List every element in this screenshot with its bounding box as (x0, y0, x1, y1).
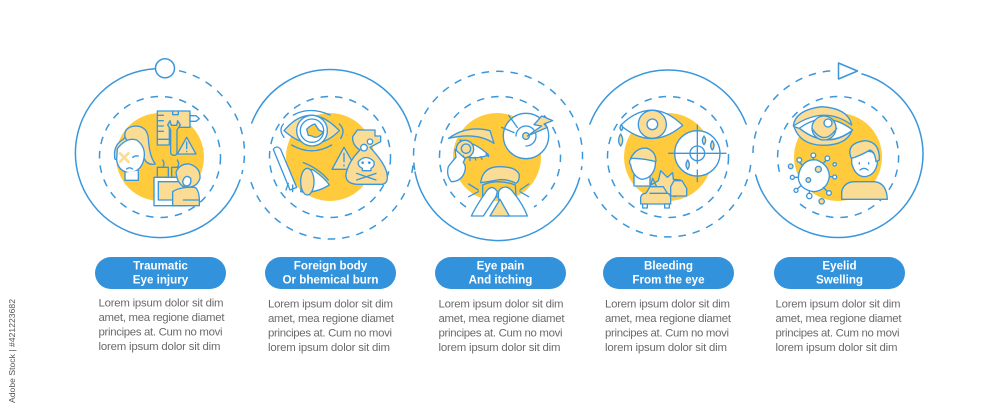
label pill: traumatic eye injury: Traumatic (133, 260, 188, 272)
inner dashed ring (270, 96, 390, 218)
body text column 4: amet, mea regione diamet (605, 313, 732, 325)
icons: drill, wrench, warning, face, stove, child (115, 111, 200, 206)
body text column 1 (98, 298, 225, 353)
label pill: traumatic eye injury (95, 257, 226, 289)
yellow disc (453, 113, 541, 201)
body text column 5 (776, 298, 902, 354)
icons: rubbed eye, target pain, crying person (448, 113, 553, 216)
panel: traumatic eye injury (75, 59, 244, 238)
label pill: bleeding (603, 257, 734, 289)
body text column 5: Lorem ipsum dolor sit dim (776, 298, 900, 310)
body text column 4: Lorem ipsum dolor sit dim (605, 298, 730, 310)
label pill: eye pain (435, 257, 566, 289)
body text column 3: principes at. Cum no movi (438, 328, 562, 340)
label pill: traumatic eye injury: Eye injury (133, 274, 189, 286)
body text column 2: principes at. Cum no movi (268, 328, 392, 340)
panel: foreign body or chemical burn (250, 69, 413, 239)
body text column 2: amet, mea regione diamet (268, 313, 395, 325)
body text column 3 (438, 298, 565, 354)
label pill: foreign body (265, 257, 396, 289)
yellow disc (624, 113, 712, 201)
ring: outer circle half dashed half solid (414, 71, 582, 241)
yellow disc (116, 113, 204, 201)
panel: eyelid swelling (753, 63, 923, 237)
inner dashed ring (440, 96, 561, 207)
body text column 1: principes at. Cum no movi (98, 326, 222, 338)
body text column 4: lorem ipsum dolor sit dim (605, 342, 727, 354)
panel: bleeding from the eye (588, 70, 751, 237)
inner dashed ring (100, 96, 220, 218)
body text column 3: amet, mea regione diamet (438, 313, 565, 325)
label pill: foreign body: Foreign body (294, 260, 368, 272)
ring: outer circle with start marker (75, 59, 244, 238)
ring: outer circle half solid half dashed (588, 70, 751, 237)
icons: bleeding eye, target drops, bandaged head, car crash (619, 110, 726, 208)
label pill: foreign body: Or bhemical burn (282, 274, 378, 286)
panel: eye pain and itching (414, 71, 582, 241)
body text column 5: principes at. Cum no movi (776, 328, 900, 340)
body text column 5: amet, mea regione diamet (776, 313, 902, 325)
label pill: eye pain: And itching (469, 274, 532, 286)
ring: outer circle half solid half dashed (250, 69, 413, 239)
body text column 2: Lorem ipsum dolor sit dim (268, 298, 393, 310)
label pill: eyelid swelling: Eyelid (822, 260, 857, 272)
ring: outer circle with end arrow (753, 63, 923, 237)
yellow disc (286, 113, 374, 201)
body text column 4: principes at. Cum no movi (605, 328, 729, 340)
body text column 2 (268, 298, 395, 354)
label pill: bleeding: From the eye (632, 274, 705, 286)
inner dashed ring (608, 96, 728, 218)
label pill: eyelid swelling: Swelling (816, 274, 863, 286)
icons: swollen eye, virus, sad person (788, 107, 887, 204)
body text column 2: lorem ipsum dolor sit dim (268, 342, 390, 354)
body text column 1: lorem ipsum dolor sit dim (98, 341, 220, 353)
body text column 3: Lorem ipsum dolor sit dim (438, 298, 564, 310)
body text column 1: Lorem ipsum dolor sit dim (98, 298, 224, 310)
icons: damaged eye, tweezers, poison flask (273, 110, 387, 195)
body text column 3: lorem ipsum dolor sit dim (438, 342, 560, 354)
body text column 5: lorem ipsum dolor sit dim (776, 342, 898, 354)
label pill: eyelid swelling (774, 257, 905, 289)
body text column 1: amet, mea regione diamet (98, 312, 225, 324)
yellow disc (794, 113, 882, 201)
label pill: eye pain: Eye pain (477, 260, 524, 272)
label pill: bleeding: Bleeding (644, 260, 693, 272)
inner dashed ring (778, 97, 899, 218)
stock id vertical label: Adobe Stock | #421223682 (7, 299, 17, 403)
body text column 4 (605, 298, 732, 354)
